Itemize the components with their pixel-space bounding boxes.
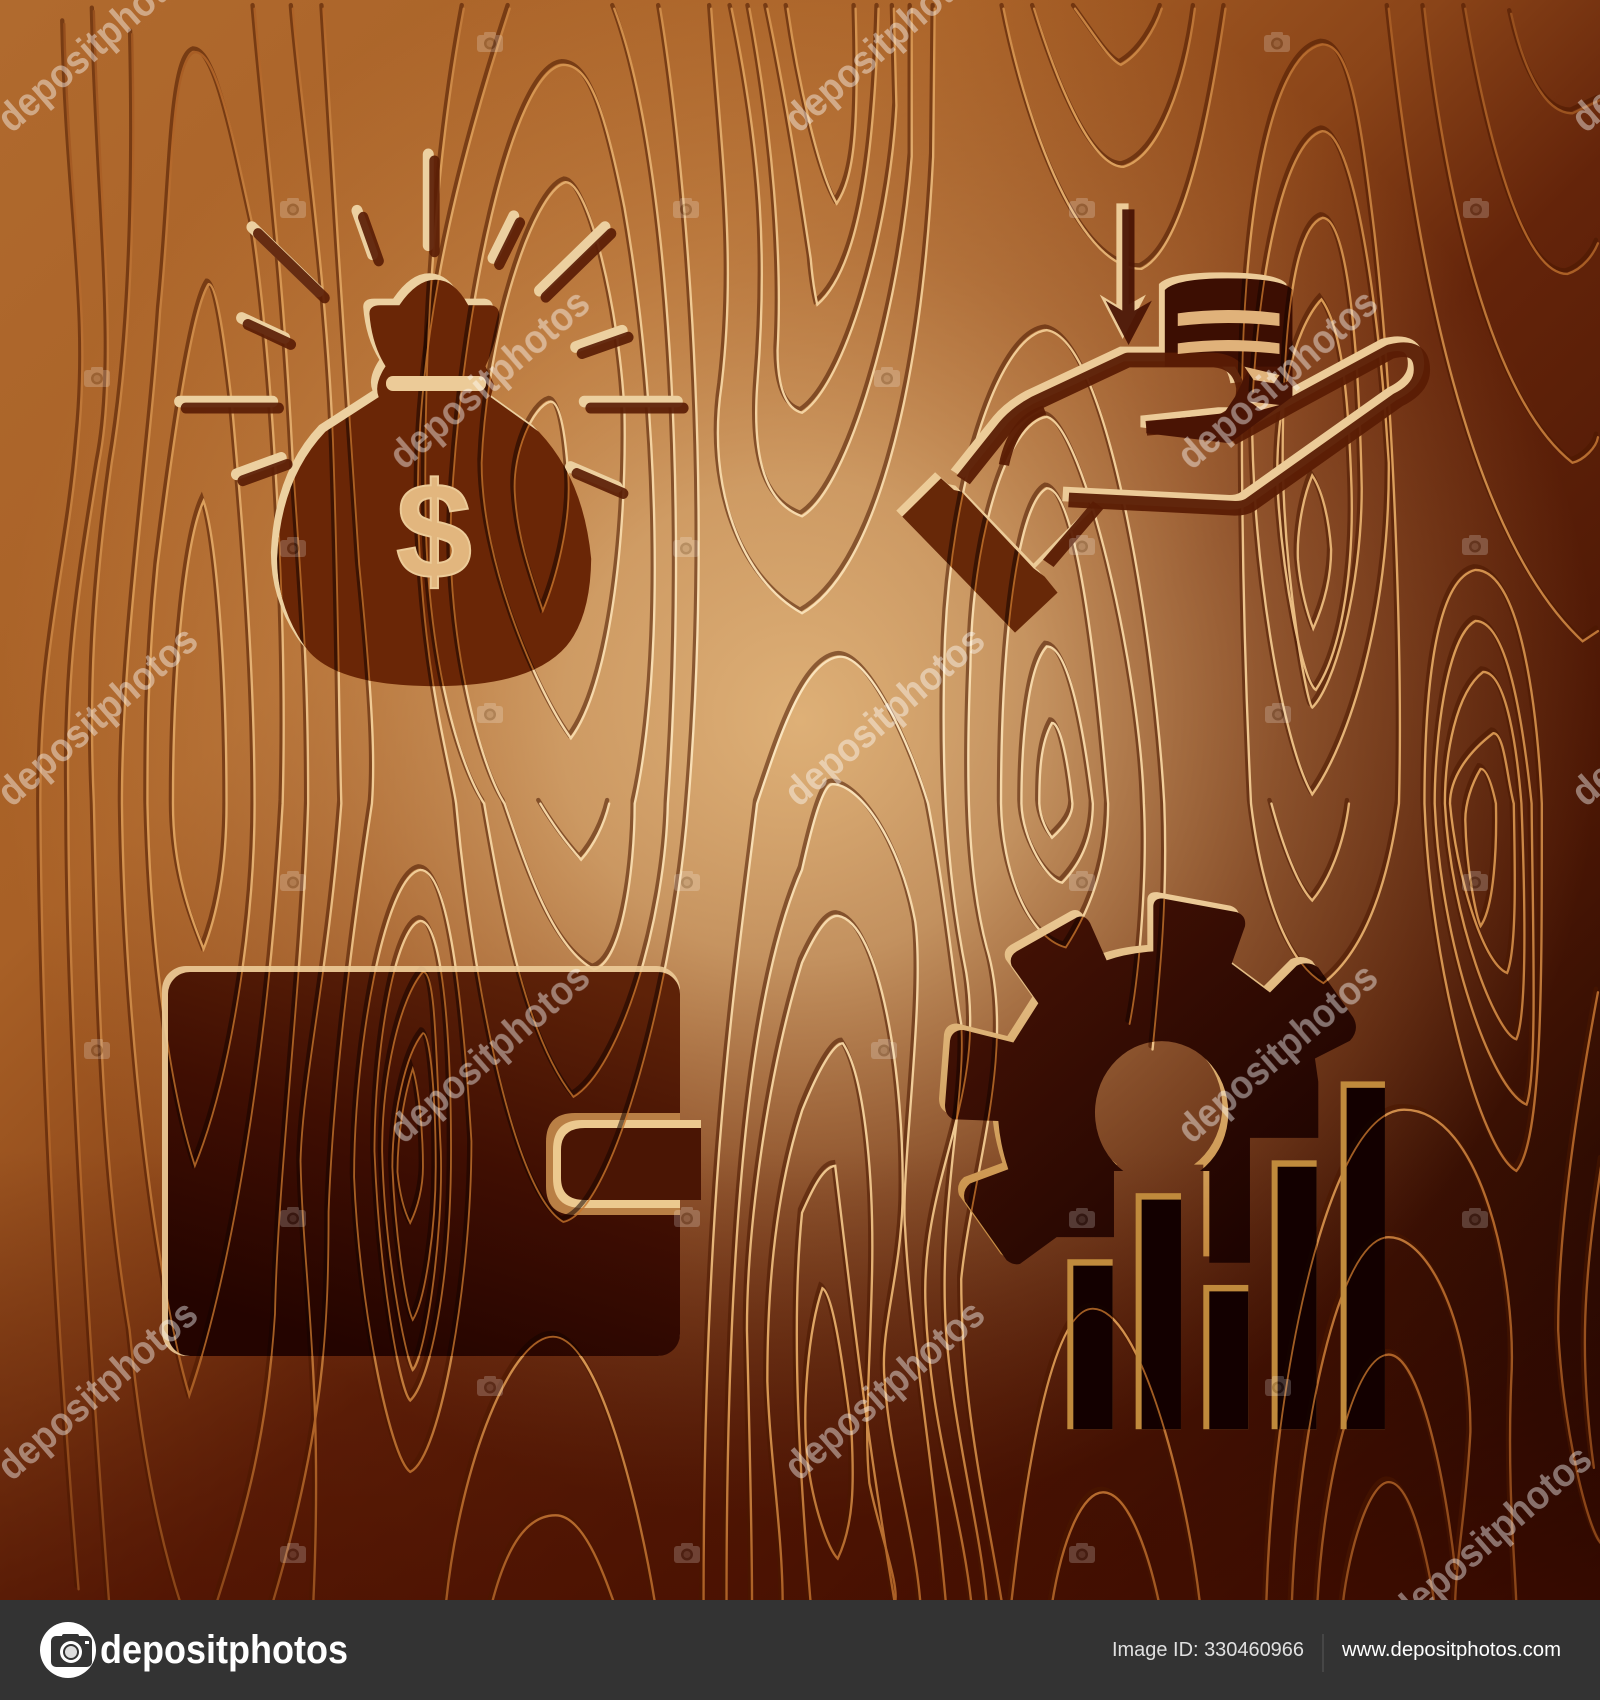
icon: money bag with rays: [180, 154, 683, 686]
icon: hand holding coins: [896, 203, 1422, 633]
logo wordmark: depositphotos: [100, 1628, 348, 1672]
hand highlight rim: [896, 203, 1416, 627]
gear rim: [939, 892, 1350, 1258]
depositphotos text watermarks: depositphotos: [1169, 281, 1386, 478]
footer bar: [0, 1600, 1600, 1700]
small camera watermarks: [84, 32, 1489, 1563]
depositphotos text watermarks: depositphotos: [381, 955, 598, 1152]
website url: www.depositphotos.com: [1341, 1639, 1561, 1661]
rays: [186, 161, 683, 493]
icon: wallet: [162, 966, 701, 1356]
depositphotos text watermarks: depositphotos: [776, 1292, 993, 1489]
wallet body: [168, 972, 680, 1356]
coin stripes: [1178, 310, 1279, 410]
hand outline: [963, 350, 1422, 563]
bars: [1073, 1088, 1385, 1429]
wallet clasp: [546, 1113, 701, 1215]
bag highlight rim: [180, 154, 677, 680]
depositphotos text watermarks: depositphotos: [381, 281, 598, 478]
dollar sign: $: [396, 455, 472, 608]
wrist inner edge: [962, 493, 1091, 567]
wood grain showing through icons: [168, 278, 1385, 1430]
bag body: [277, 280, 591, 686]
bar rims: [1067, 1081, 1385, 1429]
depositphotos text watermarks: depositphotos: [776, 618, 993, 815]
logo camera badge: [40, 1622, 96, 1678]
sleeve cuff: [902, 478, 1058, 633]
icon: gear with bar chart: [939, 892, 1385, 1429]
coin stack: [1165, 278, 1292, 393]
bag tie band: [386, 376, 486, 391]
footer logo: [40, 1622, 348, 1678]
wallet rim: [162, 966, 680, 1356]
gear: [945, 899, 1356, 1264]
arrow: [1106, 209, 1152, 345]
image id: Image ID: 330460966: [1112, 1639, 1304, 1661]
depositphotos text watermarks: depositphotos: [1169, 955, 1386, 1152]
